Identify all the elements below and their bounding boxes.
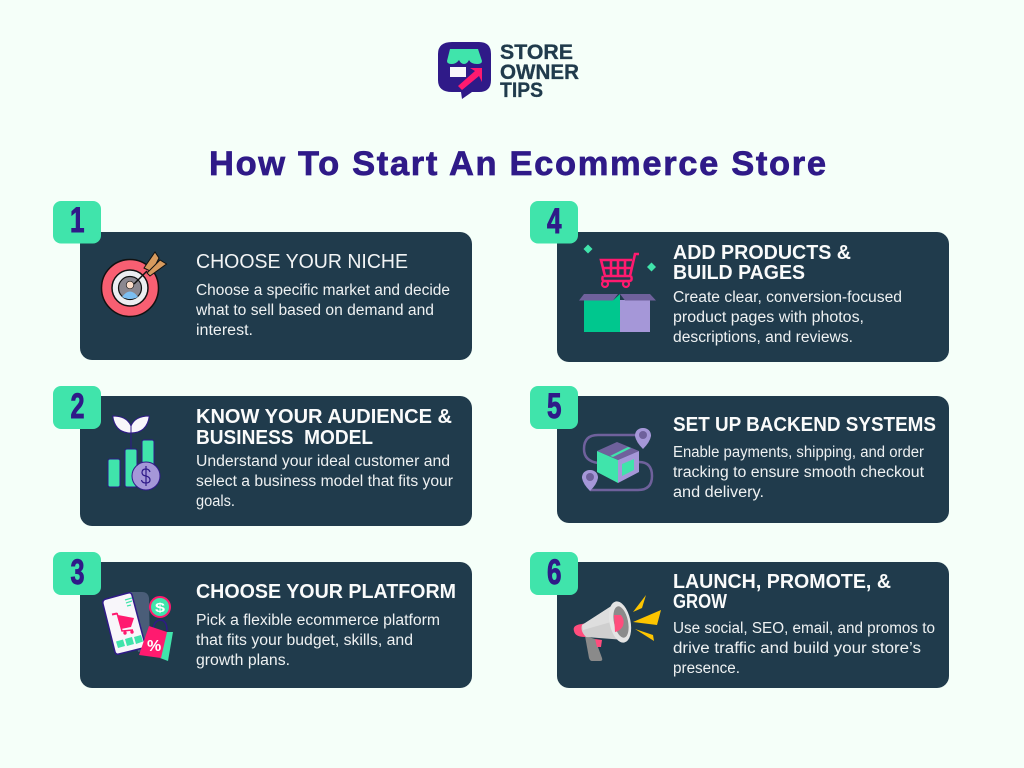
heading: CHOOSE YOUR PLATFORM — [196, 581, 456, 603]
body text — [195, 282, 450, 339]
logo — [438, 41, 579, 102]
body text — [196, 612, 440, 669]
number badge 2 — [53, 386, 101, 429]
number badge 4: 4 — [547, 202, 562, 241]
heading: CHOOSE YOUR NICHE — [196, 251, 408, 273]
body text: product pages with photos, — [673, 309, 864, 326]
heading: ADD PRODUCTS & — [673, 242, 851, 264]
body text: Choose a specific market and decide — [196, 282, 450, 299]
body text — [673, 289, 902, 346]
body text: Create clear, conversion-focused — [673, 289, 902, 306]
panel: step 1 — [53, 201, 472, 360]
heading: KNOW YOUR AUDIENCE & — [196, 406, 452, 428]
card background — [80, 562, 472, 688]
body text: that fits your budget, skills, and — [196, 632, 413, 649]
logo wordmark — [500, 41, 579, 102]
number badge 4 — [530, 201, 578, 244]
body text: what to sell based on demand and — [195, 302, 434, 319]
number badge 5: 5 — [547, 387, 562, 426]
body text — [673, 620, 935, 677]
body text: and delivery. — [673, 484, 764, 501]
body text — [673, 444, 925, 501]
number badge 1 — [53, 201, 101, 244]
panel: step 2 — [53, 386, 472, 526]
heading: BUILD PAGES — [673, 262, 805, 284]
number badge 5 — [530, 386, 578, 429]
icon: phone shop with bag — [103, 592, 173, 661]
number badge 2: 2 — [70, 387, 84, 426]
number badge 3 — [53, 552, 101, 595]
icon: cart over open box — [579, 244, 656, 332]
heading — [196, 406, 452, 449]
body text: select a business model that fits your — [196, 473, 453, 490]
card background — [80, 396, 472, 526]
number badge 6: 6 — [547, 553, 562, 592]
logo wordmark: OWNER — [500, 61, 579, 84]
icon: phone shop with bag: $ — [155, 600, 166, 615]
card background — [557, 562, 949, 688]
heading: LAUNCH, PROMOTE, & — [673, 571, 891, 593]
heading: GROW — [673, 591, 727, 613]
number badge 3: 3 — [70, 553, 84, 592]
icon: target with arrow — [102, 252, 166, 316]
logo wordmark: STORE — [500, 41, 573, 64]
icon: package route with pins — [582, 428, 652, 491]
icon: phone shop with bag: % — [147, 638, 161, 655]
panel: step 3 — [53, 552, 472, 688]
icon: megaphone — [574, 595, 661, 661]
panel: step 6 — [530, 552, 949, 688]
body text: Understand your ideal customer and — [196, 453, 450, 470]
heading: BUSINESS MODEL — [196, 427, 373, 449]
title: How To Start An Ecommerce Store — [209, 145, 826, 183]
logo wordmark: TIPS — [500, 79, 543, 102]
body text: Pick a flexible ecommerce platform — [196, 612, 440, 629]
icon: growth chart with coin — [108, 416, 160, 490]
body text — [196, 453, 453, 510]
number badge 6 — [530, 552, 578, 595]
body text: descriptions, and reviews. — [673, 329, 853, 346]
body text: Use social, SEO, email, and promos to — [673, 620, 935, 637]
body text: growth plans. — [196, 652, 290, 669]
panel: step 4 — [530, 201, 949, 362]
card background — [557, 232, 949, 362]
card background — [557, 396, 949, 523]
heading — [673, 242, 851, 284]
body text: presence. — [673, 660, 740, 677]
card background — [80, 232, 472, 360]
body text: goals. — [196, 493, 235, 510]
heading: SET UP BACKEND SYSTEMS — [673, 414, 936, 436]
body text: Enable payments, shipping, and order — [673, 444, 924, 461]
heading — [673, 571, 891, 613]
panel: step 5 — [530, 386, 949, 523]
body text: drive traffic and build your store’s — [673, 640, 921, 657]
icon: logo speech bubble — [438, 42, 491, 99]
number badge 1: 1 — [70, 201, 84, 240]
body text: tracking to ensure smooth checkout — [673, 464, 925, 481]
body text: interest. — [196, 322, 253, 339]
